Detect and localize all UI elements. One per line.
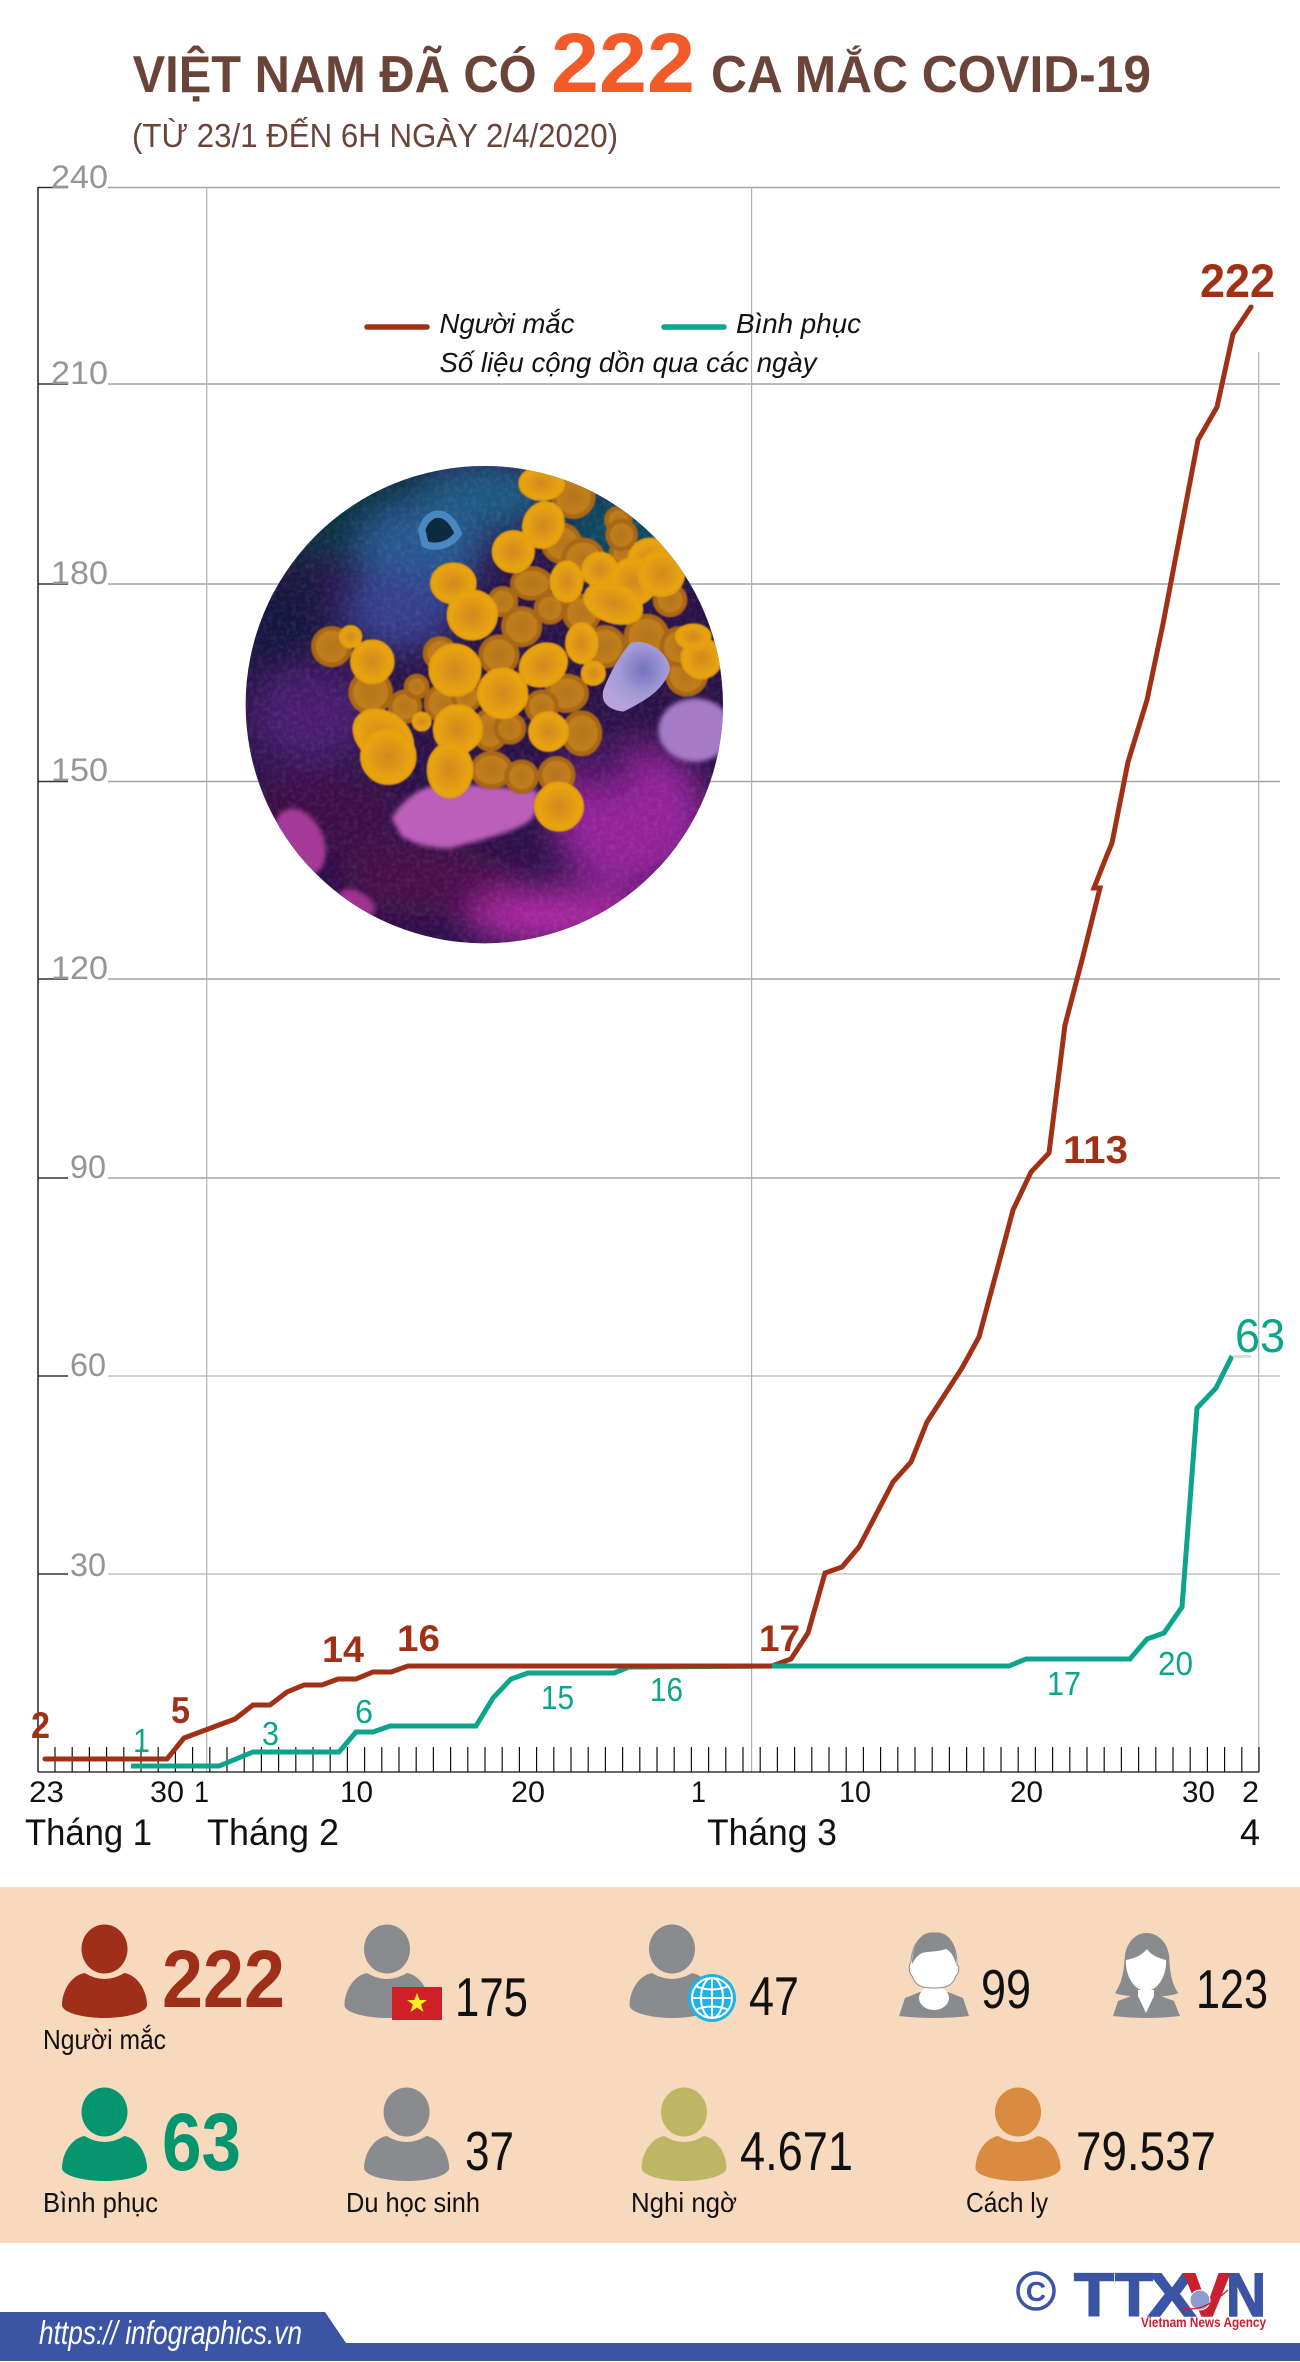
icon: globe (688, 1974, 736, 2022)
recovered value labels: 3 (262, 1715, 279, 1752)
month labels: Tháng 3 (707, 1812, 837, 1853)
stat: recovered (43, 2088, 241, 2218)
micrograph background (233, 450, 733, 953)
recovered value labels: 1 (133, 1722, 150, 1759)
stat: female: 123 (1196, 1958, 1268, 2020)
recovered value labels: 16 (650, 1671, 683, 1708)
logo: TTXVN (1018, 2261, 1266, 2330)
stat: male: 99 (981, 1958, 1031, 2020)
icon: person green (62, 2088, 147, 2181)
y axis labels: 30 (70, 1547, 106, 1583)
icon: person orange (976, 2088, 1060, 2181)
title: VIỆT NAM ĐÃ CÓ (133, 45, 537, 104)
y axis labels: 210 (51, 355, 108, 391)
infected value labels: 16 (397, 1618, 440, 1659)
month labels: 4 (1240, 1812, 1260, 1853)
subtitle: (TỪ 23/1 ĐẾN 6H NGÀY 2/4/2020) (132, 117, 618, 154)
icon: person gray (344, 1924, 430, 2018)
infected value labels: 17 (759, 1618, 800, 1659)
icon: logo globe (1182, 2290, 1228, 2310)
x axis day labels: 10 (839, 1776, 871, 1809)
stat: recovered: Bình phục (43, 2187, 158, 2218)
y axis labels: 90 (70, 1149, 106, 1185)
stat: quarantined: Cách ly (966, 2187, 1048, 2218)
recovered value labels: 20 (1158, 1645, 1193, 1682)
stat: overseas students: Du học sinh (346, 2187, 480, 2218)
title: 222 (551, 16, 695, 110)
stat: domestic cases: 175 (455, 1966, 528, 2028)
infected value labels: 2 (31, 1705, 50, 1746)
stat: imported cases (630, 1924, 799, 2027)
icon: copyright (1018, 2273, 1054, 2309)
month labels: Tháng 2 (207, 1812, 339, 1853)
recovered value labels (133, 1309, 1285, 1759)
panel: statistics (0, 1887, 1300, 2243)
legend: Bình phục (736, 308, 861, 339)
agency name: Vietnam News Agency (1141, 2314, 1266, 2330)
title: CA MẮC COVID-19 (711, 45, 1151, 104)
recovered value labels: 63 (1235, 1309, 1285, 1362)
icon: woman (1113, 1933, 1180, 2018)
icon: person olive (642, 2088, 726, 2181)
x axis day labels (29, 1776, 1259, 1809)
stat: quarantined: 79.537 (1076, 2120, 1216, 2182)
agency letters: T (1115, 2261, 1153, 2329)
month labels: Tháng 1 (25, 1812, 152, 1853)
line chart (25, 159, 1285, 1853)
agency letters: V (1184, 2261, 1230, 2329)
stat: quarantined (966, 2088, 1216, 2218)
x axis day labels: 10 (340, 1776, 373, 1809)
footer url: https:// infographics.vn (39, 2314, 302, 2351)
recovered value labels: 15 (541, 1679, 574, 1716)
recovered line, early part (131, 1666, 772, 1766)
stat: recovered: 63 (162, 2097, 241, 2188)
stat: total infected: 222 (162, 1934, 285, 2025)
stat: overseas students: 37 (465, 2120, 514, 2182)
x axis day labels: 20 (511, 1776, 545, 1809)
agency letters (1074, 2261, 1266, 2329)
x axis day labels: 30 (1182, 1776, 1215, 1809)
icon: Vietnam flag (392, 1987, 442, 2020)
stat: male (899, 1933, 1031, 2020)
y axis labels: 120 (51, 950, 108, 986)
agency letters: X (1148, 2261, 1196, 2329)
y axis labels (51, 159, 108, 1583)
title (133, 16, 1151, 110)
month labels (25, 1812, 1260, 1853)
y axis labels: 150 (51, 752, 108, 788)
infected value labels: 5 (171, 1690, 190, 1731)
x axis with day ticks (38, 1747, 1259, 1772)
agency letters: T (1074, 2261, 1114, 2329)
infected line (45, 307, 1251, 1759)
icon: person red (62, 1924, 147, 2018)
recovered line, late part (772, 1356, 1232, 1666)
x axis day labels: 1 (691, 1776, 706, 1809)
legend (367, 308, 861, 378)
footer bar (0, 2312, 1300, 2361)
stat: total infected: Người mắc (43, 2024, 166, 2055)
infected value labels: 113 (1063, 1129, 1128, 1172)
virus particles, front (341, 467, 721, 830)
stat: total infected (43, 1924, 285, 2055)
icon: person gray (630, 1924, 714, 2018)
purple cell (603, 642, 670, 712)
infected value labels: 14 (322, 1629, 364, 1670)
stat: suspected: 4.671 (740, 2120, 853, 2182)
stat: imported cases: 47 (749, 1965, 799, 2027)
y axis labels: 240 (51, 159, 108, 195)
infected value labels: 222 (1200, 254, 1275, 307)
x axis day labels: 23 (29, 1776, 64, 1809)
virus particles, rear (313, 467, 721, 830)
legend: Số liệu cộng dồn qua các ngày (440, 347, 818, 378)
icon: person gray (364, 2088, 449, 2181)
y axis labels: 60 (70, 1347, 106, 1383)
y axis labels: 180 (51, 555, 108, 591)
stat: suspected: Nghi ngờ (631, 2187, 737, 2218)
stat: overseas students (346, 2088, 514, 2218)
icon: copyright: C (1026, 2276, 1046, 2307)
icon: man (899, 1933, 969, 2018)
agency letters: N (1226, 2261, 1266, 2329)
x axis day labels: 30 (150, 1776, 184, 1809)
legend: Người mắc (440, 308, 574, 339)
stat: domestic cases (344, 1924, 528, 2028)
recovered value labels: 17 (1047, 1665, 1081, 1702)
photo: coronavirus micrograph (233, 450, 733, 953)
stat: suspected (631, 2088, 853, 2218)
x axis day labels: 2 (1242, 1776, 1259, 1809)
stat: female (1113, 1933, 1268, 2020)
chart grid (108, 187, 1280, 1772)
y axis (38, 187, 68, 1772)
x axis day labels: 1 (194, 1776, 209, 1809)
recovered value labels: 6 (355, 1693, 373, 1730)
infected value labels (31, 254, 1275, 1746)
x axis day labels: 20 (1010, 1776, 1043, 1809)
